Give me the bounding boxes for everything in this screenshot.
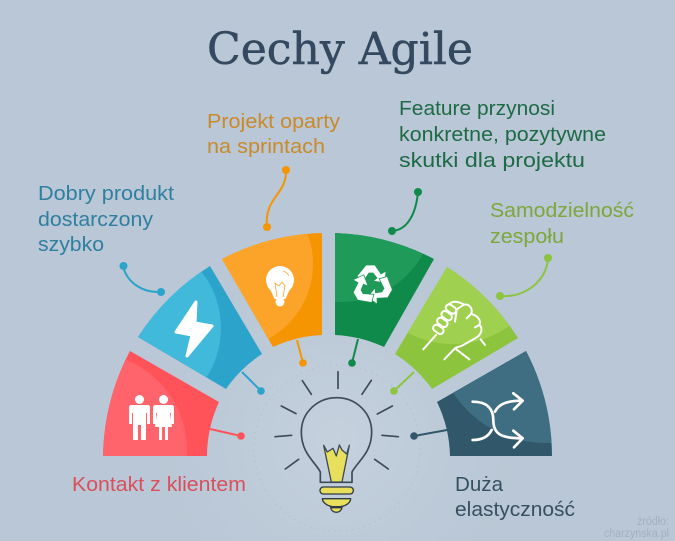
text: Dobry produkt: Dobry produkt: [38, 182, 174, 205]
connector: orange top curve: [263, 166, 290, 231]
icon: recycle: [348, 265, 397, 308]
panel: lime sector: [395, 267, 518, 389]
panel: green sector: [335, 233, 434, 347]
text: Duza elastycznosc: elastyczność: [455, 498, 575, 521]
connector: green top curve: [388, 188, 422, 235]
text: Samodzielnosc: [490, 199, 634, 248]
text: Duza elastycznosc: Duża: [455, 473, 504, 496]
text: Dobry produkt: dostarczony: [38, 208, 154, 231]
connector: lime top curve: [496, 254, 552, 300]
connector: orange: [297, 340, 307, 367]
text: Duza elastycznosc: [455, 473, 575, 521]
panel: blue sector: [138, 266, 262, 389]
text: Projekt oparty: na sprintach: [207, 135, 325, 158]
panel: teal sector: [437, 351, 552, 456]
filament: [324, 445, 349, 482]
dotted ring: [254, 365, 420, 531]
icon: lightning: [176, 302, 212, 356]
text: Feature: Feature przynosi: [399, 97, 555, 120]
connector: blue top curve: [120, 262, 165, 296]
text: Dobry produkt: szybko: [38, 233, 104, 256]
text: Samodzielnosc: zespołu: [490, 225, 564, 248]
connector: green: [348, 339, 358, 367]
text: Samodzielnosc: Samodzielność: [490, 199, 634, 222]
bulb base: [320, 487, 353, 512]
title: Cechy Agile: [207, 24, 473, 75]
text: Feature: skutki dla projektu: [399, 149, 585, 172]
panel: red sector: [103, 351, 219, 456]
icon: hands clasped: [423, 302, 485, 359]
background glow: [140, 250, 540, 541]
connector: teal: [410, 430, 447, 440]
connector: lime: [390, 372, 414, 395]
text: Dobry produkt: [38, 182, 174, 256]
bulb outline: [301, 398, 372, 482]
text: Kontakt: Kontakt z klientem: [72, 473, 246, 496]
rays: [275, 372, 398, 469]
icon: shuffle arrows: [473, 393, 523, 447]
central light bulb: [275, 372, 398, 512]
icon: small bulb: [266, 266, 294, 306]
text: Projekt oparty: [207, 110, 341, 158]
source credit: charzynska.pl: [604, 528, 669, 540]
connector: blue: [242, 372, 265, 395]
text: Feature: konkretne, pozytywne: [399, 123, 606, 146]
source credit: źródło:: [637, 516, 669, 528]
text: Projekt oparty: Projekt oparty: [207, 110, 341, 133]
panel: orange sector: [222, 233, 322, 347]
connector: red: [210, 429, 245, 440]
text: Feature: [399, 97, 606, 172]
icon: people: [129, 395, 174, 440]
source credit: [604, 516, 669, 540]
